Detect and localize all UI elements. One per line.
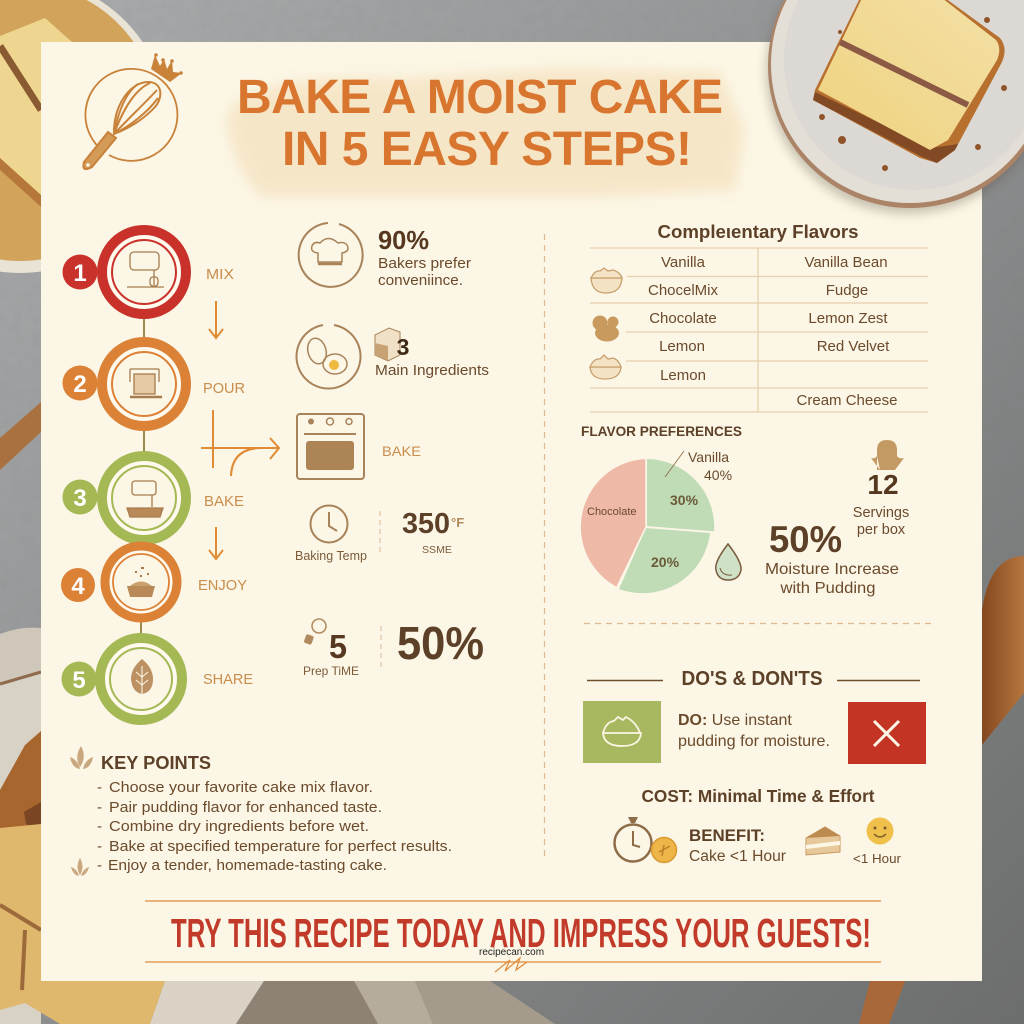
key points: - bbox=[97, 779, 102, 796]
stat: 50% moisture: 50% bbox=[769, 519, 842, 560]
complementary flavors table: Vanilla Bean bbox=[804, 254, 888, 271]
icon: moisture drop bbox=[716, 544, 741, 580]
flavor preferences pie chart: 20% bbox=[651, 554, 680, 570]
step 3: bake: BAKE bbox=[204, 493, 244, 510]
oven icon and bake label bbox=[297, 414, 421, 479]
complementary flavors table: Chocolate bbox=[649, 310, 717, 327]
stat: baking temperature: SSME bbox=[422, 545, 452, 556]
do card: DO: Use instant bbox=[678, 712, 792, 729]
horizontal divider bbox=[584, 622, 936, 624]
flavor preferences pie chart: Vanilla bbox=[688, 449, 729, 465]
step 2: pour bbox=[62, 342, 245, 426]
stat: 12 servings: per box bbox=[857, 522, 906, 538]
icon: bowl bottom bbox=[590, 355, 621, 379]
arrow: mix to pour bbox=[209, 301, 223, 338]
step 4: enjoy: ENJOY bbox=[198, 577, 247, 594]
step 5: share bbox=[62, 638, 253, 720]
process connectors bbox=[141, 315, 144, 636]
complementary flavors table: Fudge bbox=[826, 282, 868, 299]
flavor preferences pie chart: FLAVOR PREFERENCES bbox=[581, 424, 742, 439]
stat: 3 main ingredients: Main Ingredients bbox=[375, 362, 489, 379]
stat: 3 main ingredients bbox=[296, 325, 489, 389]
do card: pudding for moisture. bbox=[678, 733, 830, 750]
icon: stopwatch with coin bbox=[614, 817, 676, 862]
stat: 90% bakers: Bakers prefer bbox=[378, 255, 471, 272]
flavor preferences pie chart: 30% bbox=[670, 492, 699, 508]
icon: cookies bbox=[592, 316, 619, 342]
stat: prep time and 50%: 50% bbox=[397, 617, 484, 669]
key points bbox=[70, 746, 452, 876]
complementary flavors table: Compleιentary Flavors bbox=[658, 222, 858, 242]
key points: - bbox=[97, 818, 102, 835]
stat: prep time and 50%: Prep TiME bbox=[303, 664, 359, 678]
call to action banner bbox=[145, 901, 881, 972]
step 1: mix: 1 bbox=[73, 260, 87, 287]
step 2: pour: POUR bbox=[203, 380, 245, 397]
stat: baking temperature bbox=[295, 506, 464, 563]
step 1: mix: MIX bbox=[206, 266, 234, 283]
step 3: bake: 3 bbox=[73, 485, 87, 512]
oven icon and bake label: BAKE bbox=[382, 443, 421, 459]
stat: 90% bakers: conveniince. bbox=[378, 272, 463, 289]
complementary flavors table bbox=[590, 222, 928, 412]
complementary flavors table: Red Velvet bbox=[817, 338, 890, 355]
icon: whisk with crown bbox=[83, 53, 183, 169]
complementary flavors table: ChocelMix bbox=[648, 282, 719, 299]
arrow: bake to enjoy bbox=[209, 527, 223, 559]
key points: - bbox=[97, 799, 102, 816]
photo: wooden spoon right bbox=[859, 556, 1024, 1024]
step 3: bake bbox=[62, 456, 244, 540]
photo: top-left plate with cake slice bbox=[0, 0, 168, 273]
step 5: share: 5 bbox=[72, 667, 86, 694]
complementary flavors table: Lemon bbox=[659, 338, 705, 355]
key points: - bbox=[97, 838, 102, 855]
stat: 12 servings bbox=[853, 440, 909, 538]
don't card bbox=[848, 702, 926, 764]
step 4: enjoy: 4 bbox=[71, 573, 85, 600]
icon: bowl top bbox=[591, 268, 622, 293]
stat: 90% bakers: 90% bbox=[378, 225, 429, 255]
stat: 50% moisture: Moisture Increase bbox=[765, 561, 899, 578]
complementary flavors table: Lemon bbox=[660, 367, 706, 384]
title: IN 5 EASY STEPS! bbox=[282, 123, 692, 176]
vertical divider bbox=[544, 234, 546, 858]
key points: Choose your favorite cake mix flavor. bbox=[109, 779, 373, 796]
stat: 3 main ingredients: 3 bbox=[397, 334, 409, 360]
flavor preferences pie chart: 40% bbox=[704, 467, 732, 483]
stat: 50% moisture: with Pudding bbox=[779, 580, 876, 597]
title wash bbox=[226, 68, 745, 197]
benefit text: BENEFIT: bbox=[689, 826, 765, 845]
icon: leaf sprig small bbox=[71, 858, 89, 876]
call to action banner: recipecan.com bbox=[479, 947, 544, 958]
stat: 50% moisture bbox=[765, 519, 899, 597]
step 4: enjoy bbox=[61, 546, 247, 618]
arrow: pour to bake oven bbox=[201, 410, 279, 476]
icon: cake slice bbox=[806, 827, 840, 855]
stat: prep time and 50% bbox=[303, 617, 484, 678]
stat: 90% bakers bbox=[299, 223, 471, 289]
icon: bowl white bbox=[603, 717, 641, 746]
stat: baking temperature: 350 bbox=[402, 508, 450, 540]
stat: prep time and 50%: 5 bbox=[329, 628, 347, 665]
photo: bottom cloth bbox=[236, 981, 555, 1024]
icon: leaf sprig large bbox=[70, 746, 93, 769]
stat: baking temperature: Baking Temp bbox=[295, 549, 367, 563]
benefit text: Cake <1 Hour bbox=[689, 848, 786, 865]
flavor preferences pie chart bbox=[581, 424, 742, 593]
step 5: share: SHARE bbox=[203, 671, 253, 688]
photo: wooden spoon handle left bbox=[0, 402, 41, 470]
flavor preferences pie chart: Chocolate bbox=[587, 506, 637, 518]
photo: bottom-left cloth, plate and cake bbox=[0, 628, 264, 1024]
do's and don'ts heading: DO'S & DON'TS bbox=[682, 668, 822, 690]
cost heading: COST: Minimal Time & Effort bbox=[642, 786, 875, 806]
stat: 12 servings: Servings bbox=[853, 505, 909, 521]
step 1: mix bbox=[62, 230, 234, 314]
step 2: pour: 2 bbox=[73, 371, 87, 398]
do card bbox=[583, 701, 830, 763]
photo: top-right plate with cake slice bbox=[766, 0, 1024, 214]
key points: KEY POINTS bbox=[101, 753, 211, 773]
key points: Bake at specified temperature for perfect results. bbox=[109, 838, 452, 855]
stat: baking temperature: °F bbox=[451, 515, 464, 530]
icon: smiley and time bbox=[853, 818, 902, 866]
complementary flavors table: Vanilla bbox=[661, 254, 706, 271]
complementary flavors table: Cream Cheese bbox=[797, 392, 897, 409]
icon: smiley and time: <1 Hour bbox=[853, 851, 902, 866]
benefit text bbox=[689, 826, 786, 865]
stat: 12 servings: 12 bbox=[867, 469, 899, 500]
complementary flavors table: Lemon Zest bbox=[808, 310, 888, 327]
key points: Combine dry ingredients before wet. bbox=[109, 818, 369, 835]
title bbox=[237, 71, 723, 176]
key points: Pair pudding flavor for enhanced taste. bbox=[109, 799, 382, 816]
title: BAKE A MOIST CAKE bbox=[237, 71, 723, 124]
key points: Enjoy a tender, homemade-tasting cake. bbox=[108, 857, 387, 874]
key points: - bbox=[97, 857, 102, 874]
